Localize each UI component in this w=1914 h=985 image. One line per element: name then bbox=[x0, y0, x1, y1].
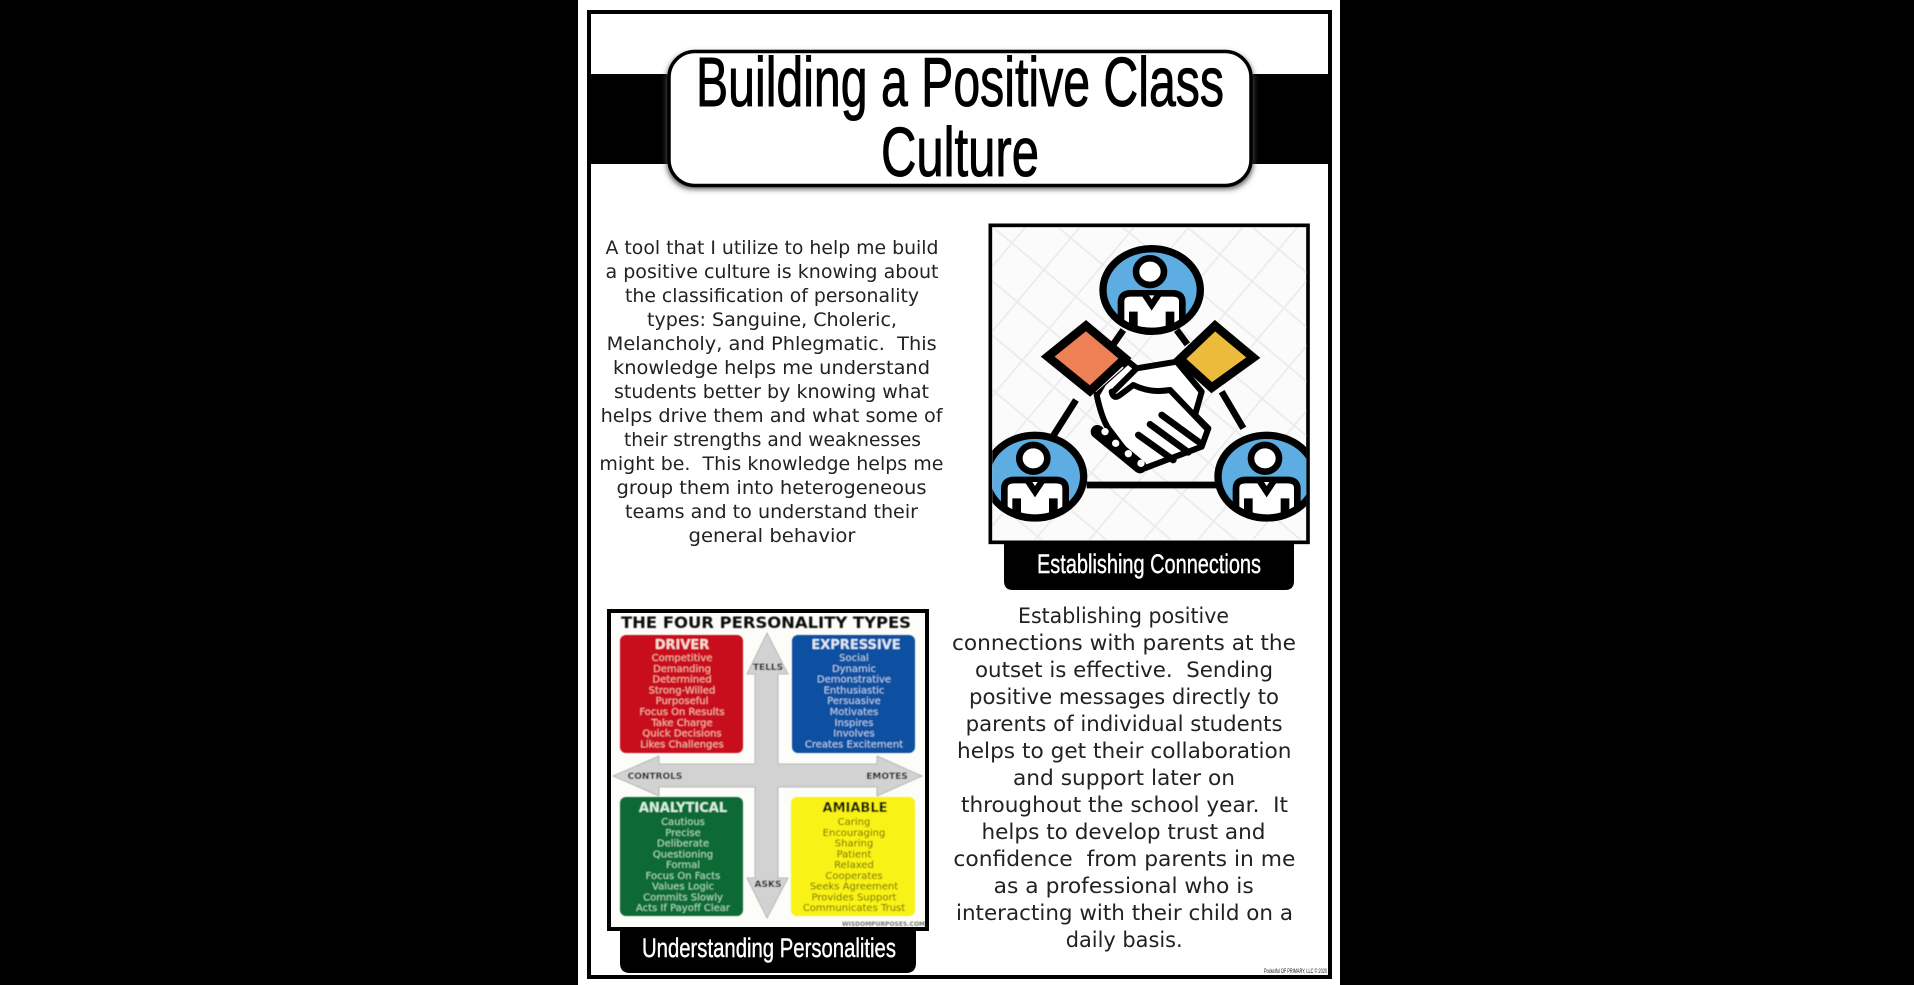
text block: parent connections: confidence from parents in me bbox=[953, 847, 1295, 871]
cross arrows bbox=[613, 633, 922, 918]
text block: parent connections: parents of individual students bbox=[966, 712, 1283, 736]
title box bbox=[669, 52, 1251, 186]
text block: parent connections: connections with parents at the bbox=[952, 631, 1296, 655]
quadrant: expressive: Persuasive bbox=[827, 696, 881, 707]
text block: personality types: knowledge helps me understand bbox=[613, 357, 930, 379]
quadrant: amiable: Sharing bbox=[835, 838, 873, 850]
caption: understanding personalities bbox=[620, 930, 916, 973]
white page bbox=[578, 0, 1340, 985]
chart: four personality types bbox=[609, 611, 927, 929]
quadrant: driver: DRIVER bbox=[655, 638, 709, 653]
quadrant: analytical: ANALYTICAL bbox=[639, 801, 727, 816]
quadrant: analytical: Cautious bbox=[661, 817, 705, 828]
quadrant: analytical: Formal bbox=[666, 860, 700, 871]
quadrant: driver: Strong-Willed bbox=[649, 685, 715, 696]
text block: personality types: types: Sanguine, Choleric, bbox=[647, 309, 897, 331]
title: Culture bbox=[881, 113, 1039, 191]
title banner bbox=[589, 43, 1330, 191]
quadrant: amiable: Encouraging bbox=[823, 828, 885, 839]
chart heading: THE FOUR PERSONALITY TYPES bbox=[621, 613, 911, 632]
title bbox=[696, 43, 1224, 191]
text block: personality types: teams and to understand their bbox=[625, 501, 918, 523]
text block: parent connections: interacting with their child on a bbox=[956, 901, 1293, 925]
text block: parent connections: Establishing positive bbox=[1018, 604, 1229, 628]
quadrant: amiable: Seeks Agreement bbox=[810, 882, 898, 892]
quadrant: driver: Focus On Results bbox=[639, 707, 725, 718]
caption: establishing connections: Establishing Connections bbox=[1037, 549, 1261, 579]
text block: parent connections: and support later on bbox=[1013, 766, 1235, 790]
arrow label emotes: EMOTES bbox=[866, 772, 908, 782]
quadrant: amiable: Patient bbox=[837, 849, 871, 860]
text block: parent connections: throughout the school year. It bbox=[961, 793, 1288, 817]
infographic page bbox=[578, 0, 1340, 985]
quadrant: analytical: Questioning bbox=[653, 849, 713, 860]
quadrant: driver: Demanding bbox=[653, 664, 711, 675]
quadrant: analytical: Precise bbox=[665, 828, 701, 839]
quadrant: analytical: Acts If Payoff Clear bbox=[636, 903, 731, 914]
quadrant: amiable: Cooperates bbox=[825, 871, 883, 882]
quadrant: driver bbox=[620, 635, 743, 753]
text block: parent connections: outset is effective. Sending bbox=[975, 658, 1273, 682]
title box shadow bbox=[667, 53, 1253, 189]
quadrant: expressive: Creates Excitement bbox=[805, 739, 903, 750]
text block: parent connections: helps to get their collaboration bbox=[957, 739, 1292, 763]
quadrant: driver: Quick Decisions bbox=[642, 729, 722, 740]
quadrant: driver: Competitive bbox=[652, 653, 712, 664]
arrow label controls: CONTROLS bbox=[628, 772, 682, 782]
quadrant: expressive: Demonstrative bbox=[817, 675, 891, 686]
quadrant: expressive: Dynamic bbox=[832, 664, 876, 675]
quadrant: driver: Determined bbox=[652, 675, 712, 686]
page frame bbox=[589, 12, 1330, 977]
caption: understanding personalities: Understanding Personalities bbox=[642, 933, 896, 963]
icon: handshake network bbox=[986, 225, 1315, 542]
text block: personality types: the classification of personality bbox=[625, 285, 919, 307]
panel: understanding personalities bbox=[609, 611, 927, 973]
text block: personality types bbox=[599, 237, 944, 547]
text block: parent connections: daily basis. bbox=[1066, 928, 1183, 952]
text block: parent connections: as a professional who is bbox=[994, 874, 1254, 898]
quadrant: expressive: Inspires bbox=[835, 718, 873, 729]
quadrant: amiable bbox=[791, 797, 915, 916]
text block: personality types: Melancholy, and Phlegmatic. This bbox=[607, 333, 937, 355]
quadrant: expressive: Social bbox=[839, 653, 869, 664]
text block: personality types: might be. This knowledge helps me bbox=[599, 453, 943, 475]
quadrant: amiable: AMIABLE bbox=[823, 801, 887, 816]
arrow label tells: TELLS bbox=[753, 663, 783, 673]
quadrant: expressive: EXPRESSIVE bbox=[811, 638, 901, 653]
title: Building a Positive Class bbox=[696, 43, 1224, 121]
text block: parent connections bbox=[952, 604, 1296, 952]
quadrant: expressive bbox=[792, 635, 915, 753]
text block: parent connections: helps to develop trust and bbox=[982, 820, 1266, 844]
text block: parent connections: positive messages directly to bbox=[969, 685, 1279, 709]
panel: establishing connections bbox=[986, 225, 1315, 590]
quadrant: analytical: Commits Slowly bbox=[643, 892, 723, 903]
quadrant: driver: Take Charge bbox=[650, 718, 713, 729]
quadrant: analytical: Focus On Facts bbox=[646, 871, 720, 882]
text block: personality types: A tool that I utilize to help me build bbox=[606, 237, 938, 259]
quadrant: expressive: Motivates bbox=[830, 707, 878, 718]
text block: personality types: students better by knowing what bbox=[614, 381, 929, 403]
text block: personality types: general behavior bbox=[688, 525, 856, 547]
quadrant: driver: Purposeful bbox=[656, 696, 708, 707]
quadrant: expressive: Involves bbox=[833, 729, 875, 740]
quadrant: expressive: Enthusiastic bbox=[824, 685, 884, 696]
text block: personality types: their strengths and weaknesses bbox=[624, 429, 921, 451]
title black band bbox=[589, 74, 1330, 164]
quadrant: analytical: Values Logic bbox=[652, 882, 714, 892]
quadrant: amiable: Provides Support bbox=[812, 892, 897, 903]
quadrant: driver: Likes Challenges bbox=[640, 739, 724, 750]
text block: personality types: helps drive them and what some of bbox=[601, 405, 944, 427]
quadrant: analytical bbox=[620, 797, 743, 916]
quadrant: amiable: Relaxed bbox=[834, 860, 874, 871]
footer credit: Pocketful OF PRIMARY, LLC © 2020 bbox=[1264, 968, 1327, 975]
caption: establishing connections bbox=[1004, 544, 1294, 590]
text block: personality types: group them into heterogeneous bbox=[616, 477, 926, 499]
chart source credit: WISDOMPURPOSES.COM bbox=[842, 921, 925, 928]
arrow label asks: ASKS bbox=[755, 880, 781, 890]
quadrant: analytical: Deliberate bbox=[657, 838, 709, 850]
quadrant: amiable: Caring bbox=[838, 817, 870, 828]
quadrant: amiable: Communicates Trust bbox=[803, 903, 905, 914]
text block: personality types: a positive culture is knowing about bbox=[606, 261, 938, 283]
